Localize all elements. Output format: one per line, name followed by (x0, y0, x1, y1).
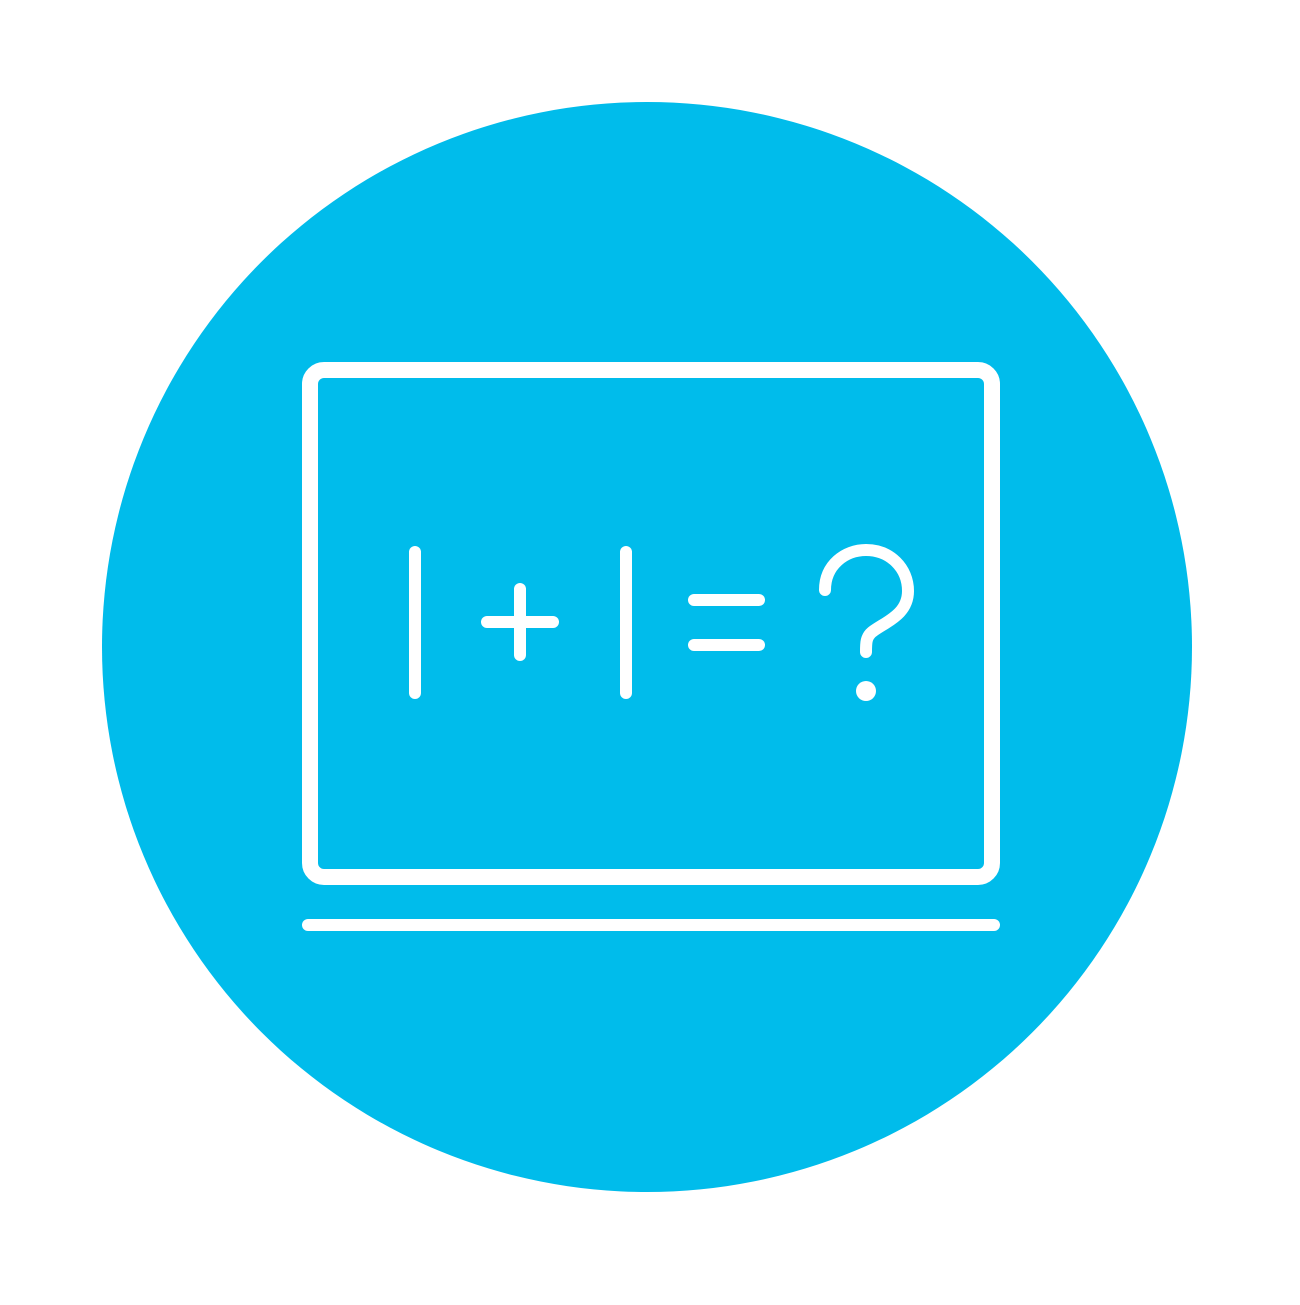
background circle (102, 102, 1192, 1192)
board base line (308, 919, 994, 931)
board frame (310, 370, 992, 877)
equation: 1 + 1 = ? (415, 550, 908, 693)
question mark dot (856, 681, 876, 701)
